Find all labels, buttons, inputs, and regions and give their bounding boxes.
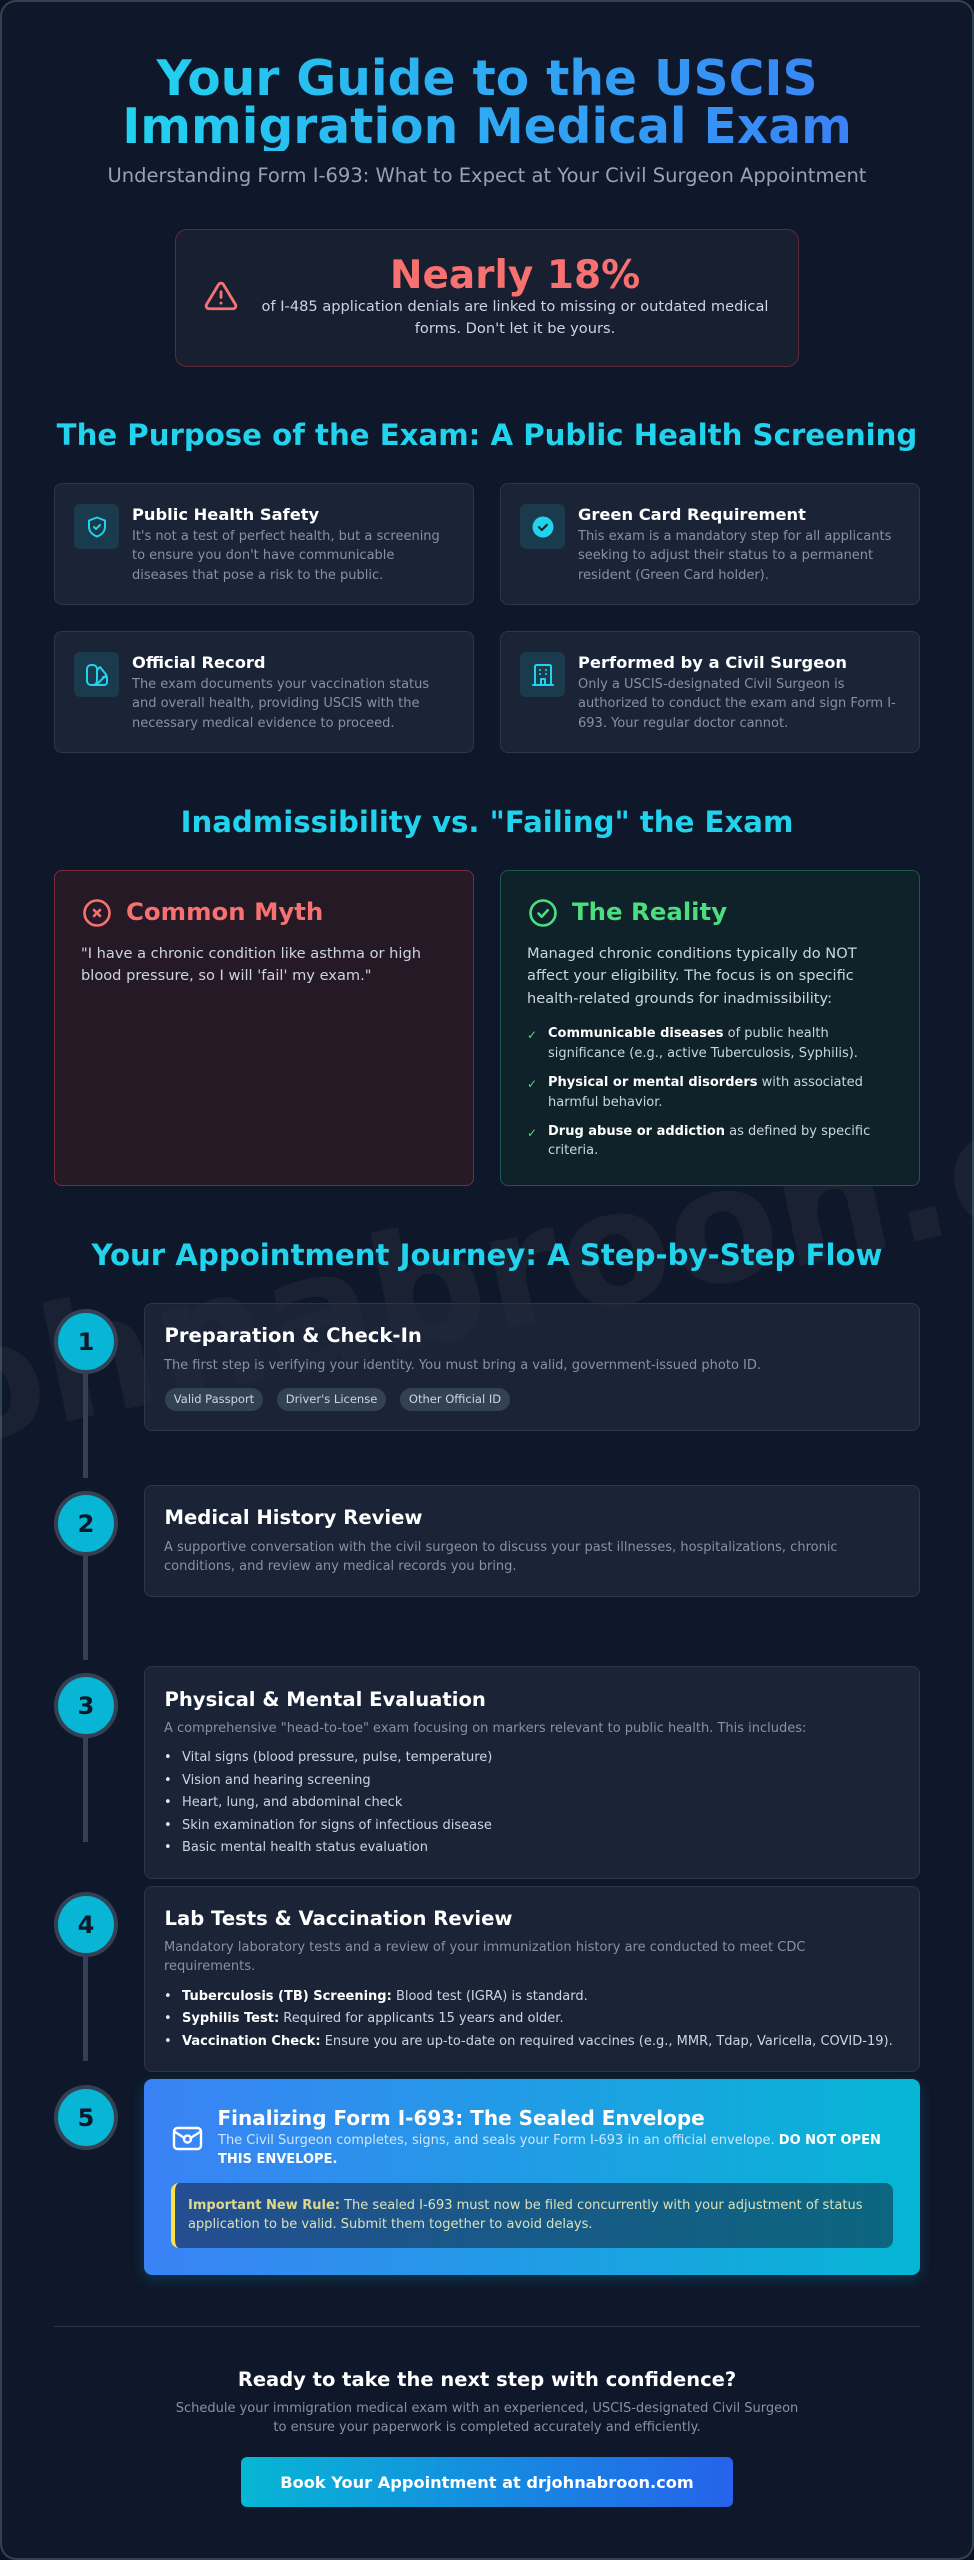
step text: The Civil Surgeon completes, signs, and seals your Form I-693 in an official envelope. DO NOT OPEN — [218, 2133, 881, 2148]
connector line 4 — [83, 1954, 88, 2061]
card title: Public Health Safety — [132, 505, 319, 524]
checklist: Basic mental health status evaluation — [182, 1840, 428, 1855]
step text — [164, 1940, 805, 1974]
checklist: • — [164, 1750, 172, 1765]
title: Your Guide to the USCIS — [156, 51, 818, 107]
card text: 693. Your regular doctor cannot. — [578, 716, 788, 730]
reality heading: The Reality — [572, 897, 727, 926]
panel: civil surgeon — [500, 631, 920, 753]
list item: communicable diseases: ✓ — [527, 1028, 537, 1042]
cta text — [176, 2401, 798, 2435]
list item: communicable diseases: Communicable diseases of public health — [548, 1026, 829, 1041]
statistic caption: forms. Don't let it be yours. — [415, 320, 615, 337]
list item: drug abuse: criteria. — [548, 1143, 598, 1158]
lab checklist: Syphilis Test: Required for applicants 15 years and older. — [182, 2011, 564, 2026]
tag: Other Official ID — [409, 1392, 501, 1406]
icon: document swatch — [74, 652, 119, 697]
card text: This exam is a mandatory step for all applicants — [578, 528, 891, 544]
title: Immigration Medical Exam — [122, 99, 852, 155]
callout: important new rule — [171, 2183, 893, 2248]
step title: Medical History Review — [164, 1506, 423, 1529]
list item: physical or mental disorders: Physical or mental disorders with associated — [548, 1075, 863, 1090]
heading: purpose: The Purpose of the Exam: A Public Health Screening — [57, 418, 917, 452]
lab checklist: Vaccination Check: Ensure you are up-to-date on required vaccines (e.g., MMR, Tdap, Varicella, COVID-19). — [182, 2034, 893, 2049]
myth quote: blood pressure, so I will 'fail' my exam." — [81, 967, 371, 984]
connector line 1 — [83, 1372, 88, 1478]
step number 4 — [54, 1892, 118, 1957]
icon: building — [520, 652, 565, 697]
tag: Valid Passport — [174, 1392, 254, 1406]
step text: conditions, and review any medical records you bring. — [164, 1559, 517, 1574]
tag — [400, 1388, 510, 1411]
panel: common myth — [54, 870, 474, 1186]
panel: step 5 sealed envelope — [144, 2079, 920, 2275]
reality text: affect your eligibility. The focus is on specific — [527, 967, 854, 984]
list item: physical or mental disorders: harmful behavior. — [548, 1094, 663, 1110]
tag — [277, 1388, 386, 1411]
reality text: health-related grounds for inadmissibility: — [527, 990, 832, 1007]
panel: the reality — [500, 870, 920, 1186]
callout text: application to be valid. Submit them together to avoid delays. — [188, 2217, 593, 2232]
tag — [165, 1388, 263, 1411]
panel: step 4 — [144, 1886, 920, 2072]
card text: necessary medical evidence to proceed. — [132, 716, 394, 730]
step text — [164, 1540, 838, 1574]
step number 2: 2 — [78, 1510, 94, 1538]
step number 4: 4 — [78, 1910, 94, 1938]
checklist: • — [164, 1773, 172, 1788]
panel: step 1 — [144, 1303, 920, 1431]
checklist: • — [164, 1795, 172, 1810]
lab checklist — [164, 1988, 893, 2049]
lab checklist: • — [164, 2034, 172, 2049]
list item: physical or mental disorders: ✓ — [527, 1077, 537, 1091]
reality text: Managed chronic conditions typically do NOT — [527, 945, 857, 962]
cta button — [241, 2457, 733, 2507]
tag: Driver's License — [286, 1392, 377, 1406]
card text: seeking to adjust their status to a permanent — [578, 548, 873, 563]
subtitle: Understanding Form I-693: What to Expect at Your Civil Surgeon Appointment — [108, 164, 866, 187]
icon: warning triangle — [204, 282, 238, 310]
step text: A comprehensive "head-to-toe" exam focusing on markers relevant to public health. This includes: — [164, 1721, 806, 1736]
list item: drug abuse: ✓ — [527, 1126, 537, 1140]
call to action — [176, 2368, 798, 2507]
reality list — [527, 1026, 870, 1158]
step number 3: 3 — [78, 1692, 94, 1720]
panel: step 2 — [144, 1485, 920, 1597]
statistic caption: of I-485 application denials are linked to missing or outdated medical — [262, 298, 768, 315]
step text: THIS ENVELOPE. — [218, 2152, 337, 2167]
statistic: Nearly 18% — [390, 253, 640, 298]
lab checklist: • — [164, 1988, 172, 2004]
icon: check badge — [520, 504, 565, 549]
card text: diseases that pose a risk to the public. — [132, 568, 383, 582]
myth quote: "I have a chronic condition like asthma or high — [81, 945, 421, 962]
step title: Physical & Mental Evaluation — [164, 1688, 486, 1711]
card title: Performed by a Civil Surgeon — [578, 653, 847, 672]
card text: It's not a test of perfect health, but a screening — [132, 528, 440, 544]
panel: green card requirement — [500, 483, 920, 605]
statistic caption — [262, 298, 768, 337]
lab checklist: Tuberculosis (TB) Screening: Blood test (IGRA) is standard. — [182, 1988, 588, 2004]
step text: requirements. — [164, 1959, 255, 1974]
panel: step 3 — [144, 1666, 920, 1879]
checklist: Vision and hearing screening — [182, 1773, 371, 1788]
card text — [132, 676, 429, 730]
card text — [132, 528, 440, 582]
list item: drug abuse: Drug abuse or addiction as defined by specific — [548, 1124, 870, 1138]
icon: check circle — [529, 899, 557, 927]
checklist: Vital signs (blood pressure, pulse, temperature) — [182, 1750, 492, 1765]
callout text — [188, 2198, 862, 2232]
heading: journey: Your Appointment Journey: A Step-by-Step Flow — [92, 1238, 882, 1272]
callout: denial statistic — [175, 229, 799, 367]
myth quote — [81, 945, 421, 984]
step number 2 — [54, 1491, 118, 1556]
icon: x circle — [83, 899, 111, 927]
card text: authorized to conduct the exam and sign Form I- — [578, 696, 896, 711]
checklist — [164, 1750, 492, 1855]
step text: Mandatory laboratory tests and a review of your immunization history are conducted to meet CDC — [164, 1940, 805, 1955]
step number 1: 1 — [78, 1328, 94, 1356]
card text — [578, 676, 896, 730]
step title: Lab Tests & Vaccination Review — [164, 1907, 513, 1930]
step title: Preparation & Check-In — [164, 1324, 422, 1347]
title — [122, 55, 852, 151]
connector line 2 — [83, 1553, 88, 1660]
list item: communicable diseases: significance (e.g., active Tuberculosis, Syphilis). — [548, 1046, 858, 1060]
myth heading: Common Myth — [126, 897, 323, 926]
checklist: Skin examination for signs of infectious disease — [182, 1818, 492, 1833]
cta text: to ensure your paperwork is completed accurately and efficiently. — [273, 2420, 701, 2435]
icon: shield — [74, 504, 119, 549]
card text — [578, 528, 891, 582]
card text: The exam documents your vaccination status — [132, 676, 429, 692]
list item: communicable diseases — [527, 1026, 858, 1060]
step text: A supportive conversation with the civil surgeon to discuss your past illnesses, hospitalizations, chronic — [164, 1540, 838, 1555]
cta button: Book Your Appointment at drjohnabroon.com — [280, 2473, 694, 2492]
card text: to ensure you don't have communicable — [132, 548, 394, 563]
icon: envelope — [172, 2126, 202, 2150]
connector line 3 — [83, 1735, 88, 1842]
panel: public health safety — [54, 483, 474, 605]
step text: The first step is verifying your identity. You must bring a valid, government-issued photo ID. — [164, 1358, 761, 1373]
step title: Finalizing Form I-693: The Sealed Envelope — [218, 2106, 705, 2130]
step number 5: 5 — [78, 2104, 94, 2132]
lab checklist: • — [164, 2011, 172, 2026]
divider — [54, 2326, 920, 2327]
heading: inadmissibility: Inadmissibility vs. "Failing" the Exam — [181, 805, 793, 839]
checklist: • — [164, 1840, 172, 1855]
callout text: Important New Rule: The sealed I-693 must now be filed concurrently with your adjustment of status — [188, 2198, 862, 2213]
card text: resident (Green Card holder). — [578, 568, 769, 582]
step number 1 — [54, 1309, 118, 1374]
cta heading: Ready to take the next step with confidence? — [238, 2368, 736, 2391]
checklist: Heart, lung, and abdominal check — [182, 1795, 402, 1810]
checklist: • — [164, 1818, 172, 1833]
step number 5 — [54, 2085, 118, 2150]
card title: Green Card Requirement — [578, 505, 806, 524]
card text: Only a USCIS-designated Civil Surgeon is — [578, 676, 845, 692]
card title: Official Record — [132, 653, 266, 672]
step number 3 — [54, 1673, 118, 1738]
list item: physical or mental disorders — [527, 1075, 863, 1110]
list item: drug abuse — [527, 1124, 870, 1158]
cta text: Schedule your immigration medical exam with an experienced, USCIS-designated Civil Surgeon — [176, 2401, 798, 2416]
card text: and overall health, providing USCIS with the — [132, 696, 420, 711]
reality text — [527, 945, 857, 1007]
step text — [218, 2133, 881, 2167]
panel: official record — [54, 631, 474, 753]
